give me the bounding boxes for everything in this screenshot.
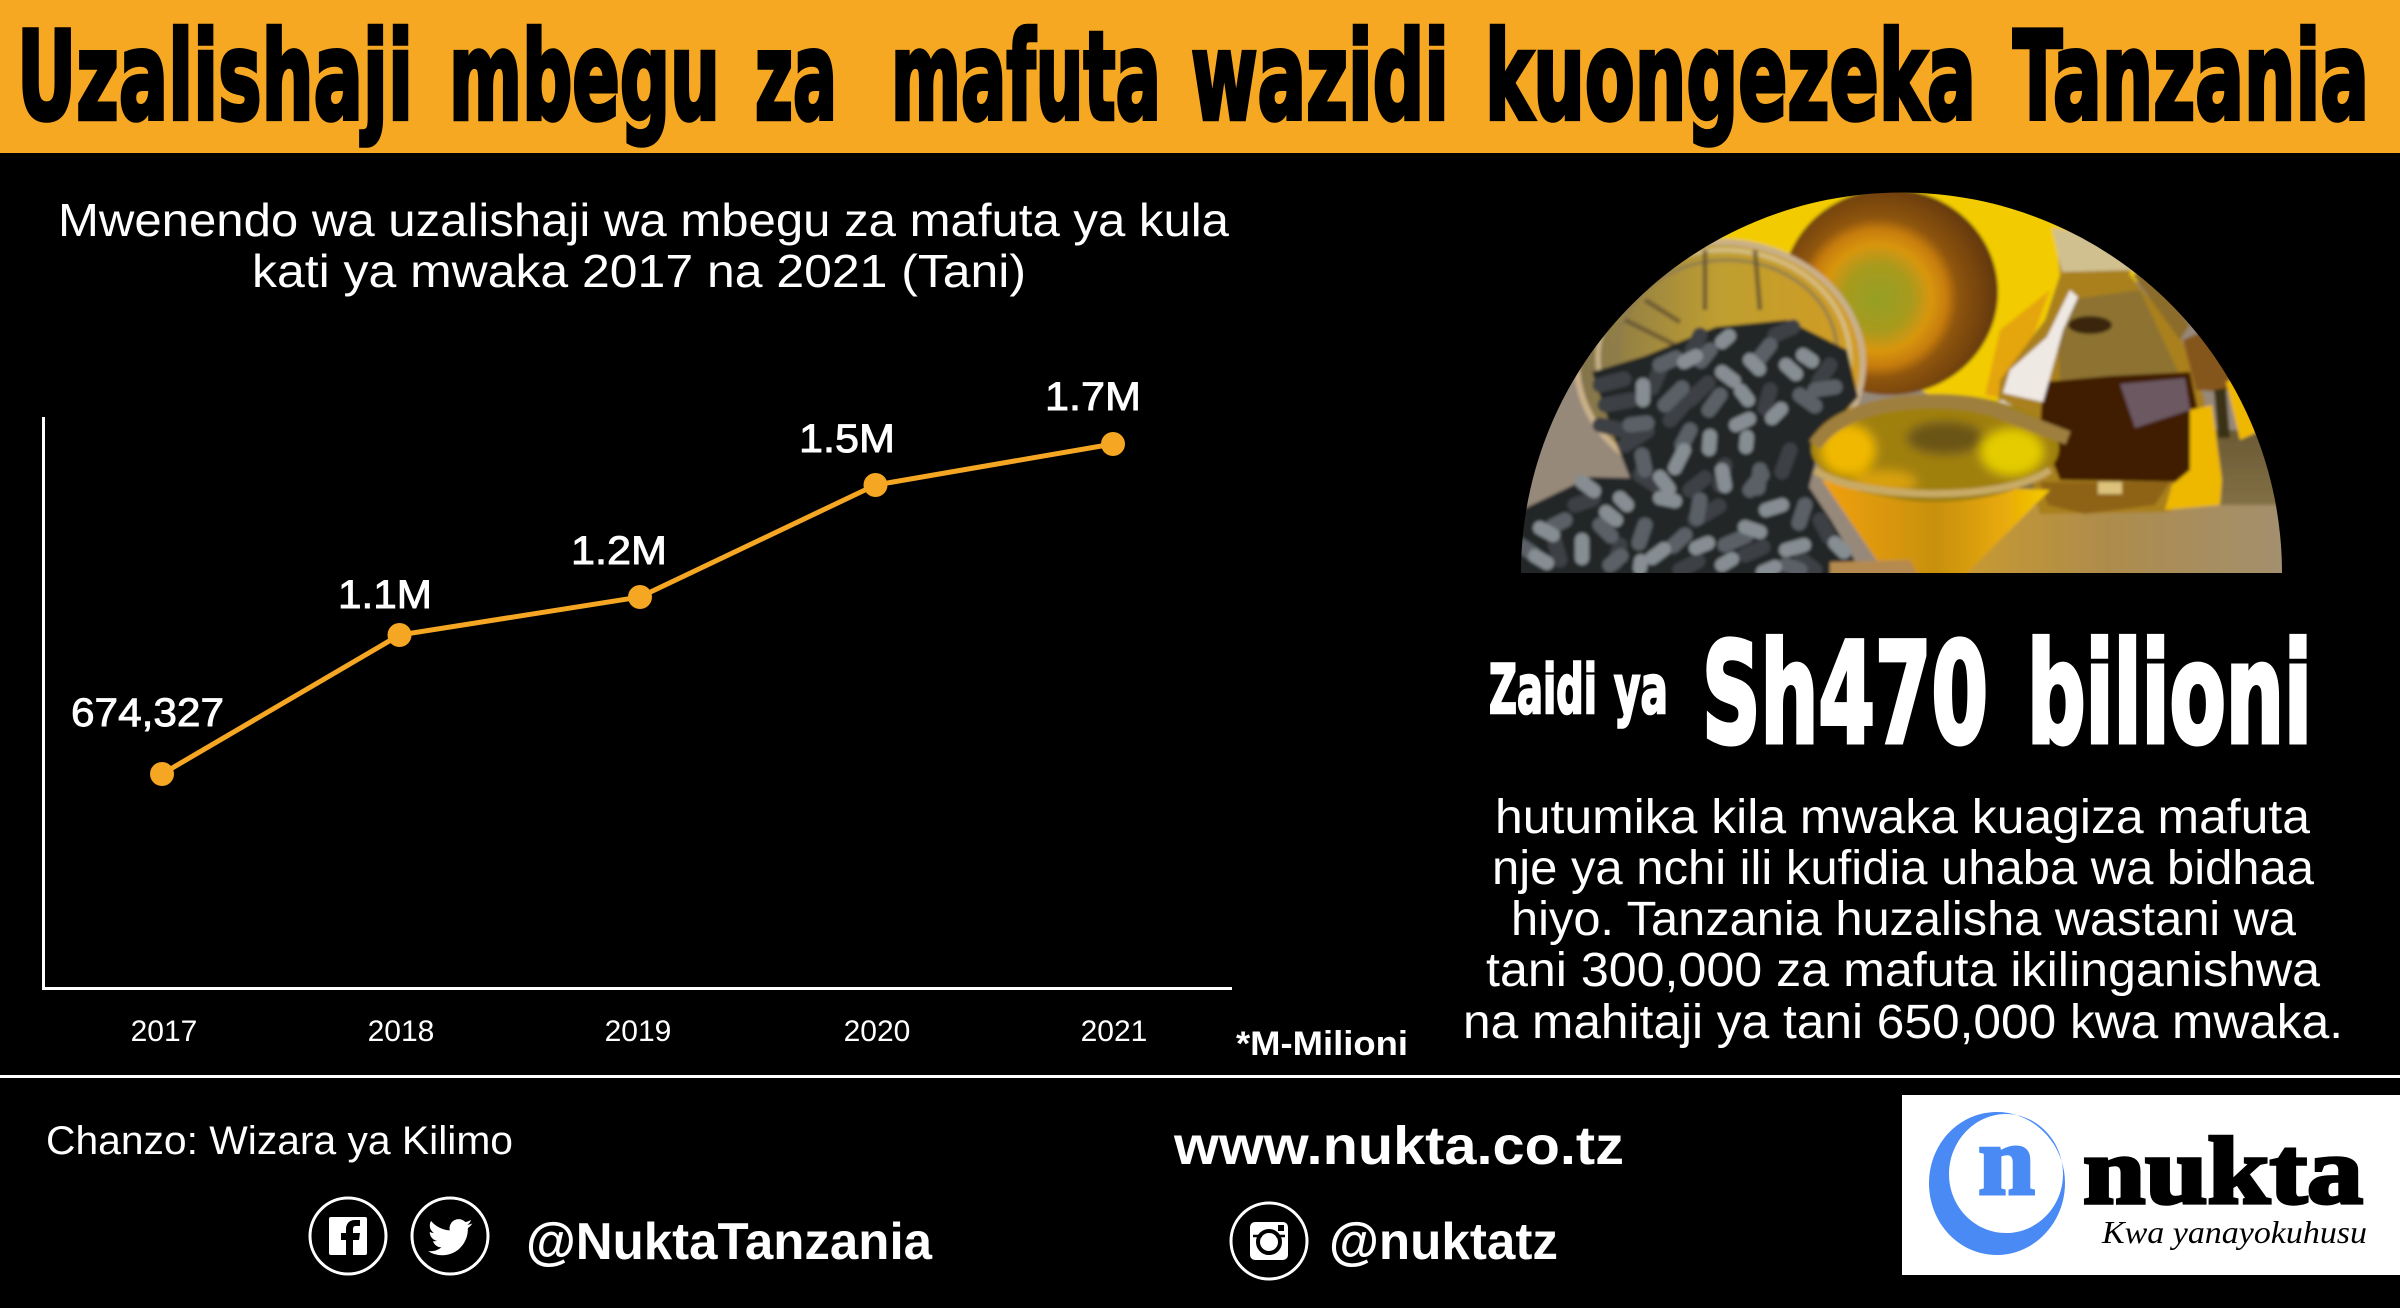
year axis labels: 2018 (368, 1015, 434, 1048)
logo tagline: Kwa yanayokuhusu (2101, 1214, 2367, 1250)
icon: facebook (310, 1198, 386, 1274)
title: mbegu (449, 6, 720, 148)
photo: sunflower seeds and oil (1515, 180, 2290, 580)
footer divider (0, 1075, 2400, 1078)
logo n: n (1978, 1105, 2035, 1216)
description paragraph: na mahitaji ya tani 650,000 kwa mwaka. (1463, 996, 2343, 1049)
year axis labels: 2019 (605, 1015, 671, 1048)
line chart (44, 375, 1232, 1048)
data labels: 1.2M (571, 529, 667, 573)
chart axes (44, 417, 1232, 988)
chart title: Mwenendo wa uzalishaji wa mbegu za mafuta ya kula (58, 194, 1229, 246)
yellow petals (1716, 192, 2139, 404)
source: Chanzo: Wizara ya Kilimo (46, 1119, 513, 1163)
data labels: 1.7M (1045, 375, 1141, 419)
sunflower head (1782, 189, 1998, 395)
burlap backdrop (1526, 270, 2240, 564)
icon: twitter (412, 1198, 488, 1274)
chart title: kati ya mwaka 2017 na 2021 (Tani) (252, 245, 1026, 297)
description paragraph (1463, 791, 2343, 1049)
title: Uzalishaji (17, 6, 413, 148)
logo crescent (1929, 1112, 2065, 1255)
headline amount (1489, 613, 2312, 775)
data points (150, 432, 1125, 786)
data labels: 674,327 (71, 691, 224, 735)
headline amount: ya (1614, 651, 1668, 730)
twitter and facebook handle: @NuktaTanzania (526, 1213, 933, 1271)
title: wazidi (1191, 6, 1449, 148)
bowl of oil (1811, 394, 2068, 580)
data labels: 1.5M (799, 417, 895, 461)
header banner (0, 0, 2400, 153)
unit note: *M-Milioni (1236, 1025, 1408, 1063)
logo wordmark: nukta (2083, 1118, 2363, 1224)
headline amount: Zaidi (1489, 651, 1597, 730)
description paragraph: nje ya nchi ili kufidia uhaba wa bidhaa (1492, 842, 2314, 895)
description paragraph: hutumika kila mwaka kuagiza mafuta (1495, 791, 2310, 844)
title: za (755, 6, 837, 148)
description paragraph: tani 300,000 za mafuta ikilinganishwa (1486, 944, 2320, 997)
title: mafuta (891, 6, 1161, 148)
data labels (71, 375, 1141, 735)
data labels: 1.1M (338, 573, 432, 617)
chart title (58, 194, 1229, 297)
instagram handle: @nuktatz (1329, 1213, 1558, 1271)
year axis labels: 2020 (844, 1015, 910, 1048)
headline amount: Sh470 (1702, 613, 1988, 775)
flower behind bottle (2165, 330, 2262, 510)
basket (1577, 242, 1863, 486)
description paragraph: hiyo. Tanzania huzalisha wastani wa (1511, 893, 2296, 946)
year axis labels (131, 1015, 1147, 1048)
oil bottle (1990, 228, 2205, 514)
seed pile (1515, 320, 1866, 580)
title (17, 6, 2369, 148)
website: www.nukta.co.tz (1173, 1116, 1624, 1176)
title: kuongezeka (1485, 6, 1976, 148)
data line (162, 444, 1113, 774)
logo: nukta (1902, 1095, 2400, 1275)
year axis labels: 2017 (131, 1015, 197, 1048)
year axis labels: 2021 (1081, 1015, 1147, 1048)
icon: instagram (1231, 1203, 1307, 1279)
